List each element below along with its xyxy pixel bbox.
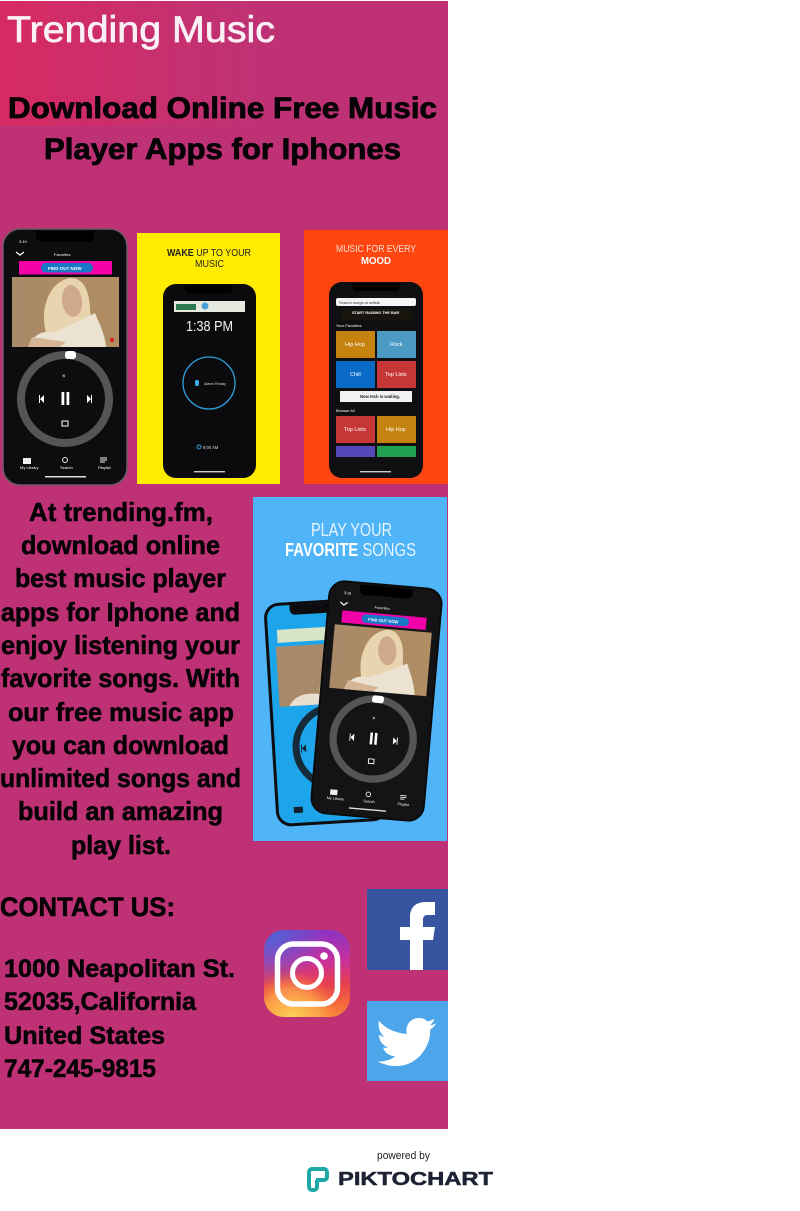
footer: powered by: powered by — [377, 1150, 430, 1162]
front phone: Playlist — [397, 802, 409, 807]
heading: contact us: CONTACT US: — [0, 892, 175, 922]
heading: play your favorite songs — [285, 520, 416, 560]
front phone: My Library — [327, 796, 344, 801]
body text — [0, 497, 241, 860]
back phone — [263, 597, 389, 827]
title: Download Online Free Music — [8, 92, 437, 125]
logo: piktochart — [309, 1168, 494, 1190]
icon: facebook — [367, 889, 448, 970]
phone: favorites player: My Library — [20, 465, 39, 470]
phone: alarm: 1:38 PM — [186, 319, 233, 335]
wordmark: PIKTOCHART — [338, 1168, 494, 1189]
genre tiles: Top Lists — [385, 372, 407, 378]
body text: enjoy listening your — [1, 630, 240, 660]
phone: genre browser: Search songs or artists — [339, 300, 380, 305]
header gradient band — [0, 1, 305, 126]
title — [8, 92, 437, 166]
contact details — [4, 955, 235, 1083]
phone: favorites player: Favorites — [54, 252, 70, 257]
phone: genre browser — [329, 282, 423, 478]
genre tiles: Chill — [350, 372, 361, 378]
phone: favorites player: 3:19 — [19, 239, 28, 244]
background panel — [0, 1, 448, 1129]
phone: favorites player — [3, 229, 127, 485]
phone: genre browser: Now tech is waiting. — [360, 394, 400, 399]
body text: download online — [21, 530, 220, 560]
logo mark — [309, 1169, 327, 1190]
panel: music for every mood: MOOD — [361, 255, 391, 267]
body text: At trending.fm, — [29, 497, 213, 527]
icon: twitter — [367, 1001, 448, 1081]
front phone: × — [372, 716, 376, 722]
body text: you can download — [12, 730, 229, 760]
genre tiles: Rock — [390, 342, 403, 348]
body text: apps for Iphone and — [1, 597, 240, 627]
front phone: Favorites — [374, 606, 390, 611]
body text: favorite songs. With — [1, 663, 240, 693]
phone: genre browser: START RAISING THE BAR — [352, 311, 399, 315]
body text: build an amazing — [18, 796, 223, 826]
phone: favorites player: Playlist — [98, 465, 112, 470]
contact details: United States — [4, 1022, 165, 1050]
contact details: 1000 Neapolitan St. — [4, 955, 235, 983]
front phone — [310, 580, 443, 822]
phone: favorites player: FIND OUT NOW — [48, 266, 82, 271]
icon: instagram — [264, 930, 350, 1017]
panel: music for every mood — [304, 230, 448, 484]
phone: alarm: Alarm Ready — [204, 382, 226, 386]
panel: play your favorite songs — [253, 497, 447, 841]
heading: play your favorite songs: PLAY YOUR — [311, 520, 392, 540]
logo: Trending Music: Trending Music — [7, 9, 275, 50]
title: Player Apps for Iphones — [44, 133, 401, 166]
phone: favorites player: × — [62, 374, 66, 380]
phone: alarm: 9:00 AM — [203, 445, 219, 450]
body text: play list. — [71, 830, 171, 860]
phone: alarm — [163, 284, 256, 478]
body text: best music player — [15, 563, 226, 593]
genre tiles: Top Lists — [344, 427, 366, 433]
heading: play your favorite songs: FAVORITE SONGS — [285, 540, 416, 560]
panel: wake up — [137, 233, 280, 484]
heading: wake up to your music: WAKE UP TO YOUR — [167, 247, 251, 259]
front phone: FIND OUT NOW — [368, 617, 399, 624]
front phone: 3:19 — [344, 591, 351, 596]
phone: genre browser: Your Favorites — [336, 323, 362, 328]
genre tiles: Hip Hop — [345, 342, 365, 348]
phone: favorites player: Search — [60, 465, 73, 470]
contact details: 747-245-9815 — [4, 1055, 156, 1083]
front phone: Search — [363, 799, 375, 804]
contact details: 52035,California — [4, 988, 197, 1016]
genre tiles: Hip Hop — [386, 427, 406, 433]
body text: unlimited songs and — [0, 763, 241, 793]
genre tiles — [336, 331, 416, 457]
panel: wake up: MUSIC — [195, 258, 224, 270]
phone: genre browser: Browse All — [336, 408, 355, 413]
heading: music for every mood: MUSIC FOR EVERY — [336, 243, 416, 255]
body text: our free music app — [8, 697, 234, 727]
